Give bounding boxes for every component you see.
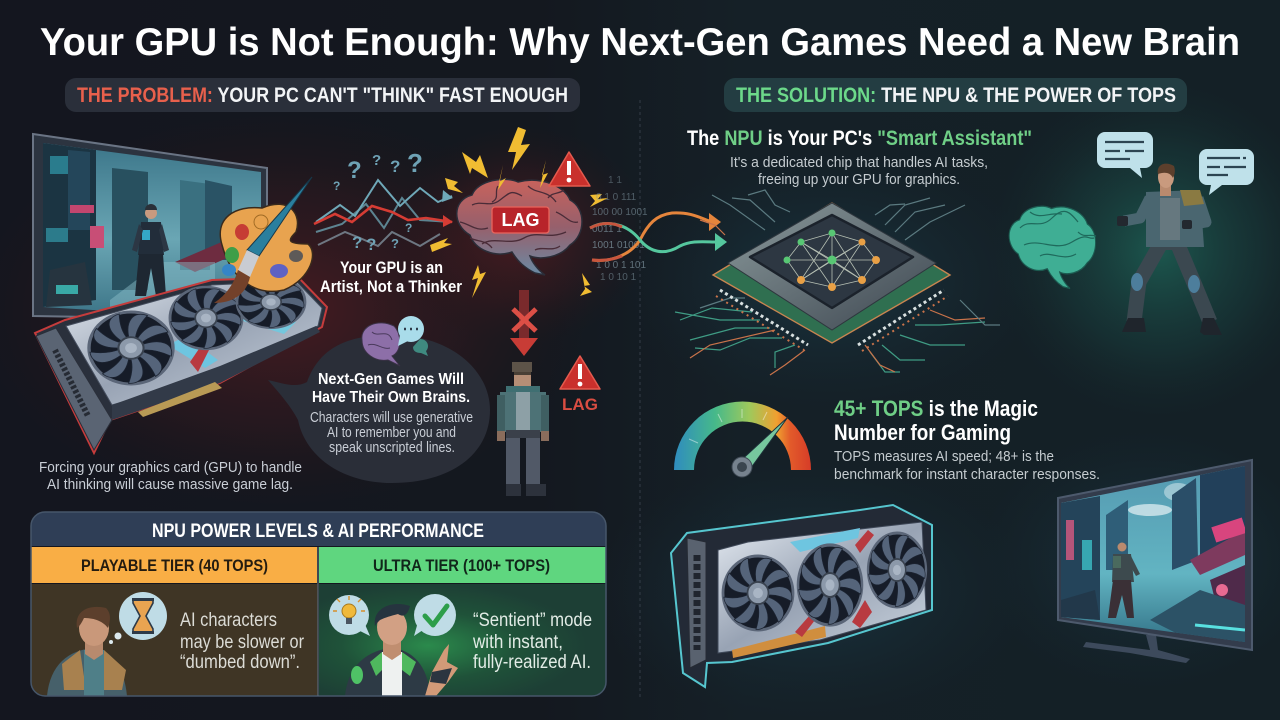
text: playable tier: “dumbed down”. <box>180 652 300 673</box>
icon: warning triangle <box>549 152 590 186</box>
text: ultra tier: fully-realized AI. <box>473 652 591 673</box>
callout: next-gen games bubble: AI to remember you and <box>327 425 456 441</box>
text: NPU smart assistant: freeing up your GPU for graphics. <box>758 171 960 188</box>
heading: the problem: THE PROBLEM: YOUR PC CAN'T "THINK" FAST ENOUGH <box>77 84 568 107</box>
icon: thought bubble with hourglass <box>109 592 167 644</box>
arrows: tangled thoughts with question marks: ? <box>372 152 381 169</box>
callout: next-gen games bubble: Have Their Own Brains. <box>312 389 470 406</box>
panel heading <box>31 512 606 546</box>
text: playable tier: AI characters <box>180 610 277 631</box>
icon: warning with lag label <box>560 356 600 414</box>
playable tier body <box>31 584 318 696</box>
callout: next-gen games bubble: Next-Gen Games Will <box>318 371 464 388</box>
decoration: binary data stream: 0 1 0 111 <box>596 192 637 203</box>
illustration: NPU chip <box>675 190 1000 375</box>
text: playable tier: may be slower or <box>180 632 305 653</box>
game character <box>132 204 169 296</box>
text: GPU is an artist: Artist, Not a Thinker <box>320 277 462 296</box>
text: 45+ TOPS: Number for Gaming <box>834 420 1011 445</box>
illustration: gpu with red outline <box>35 275 327 453</box>
decoration: binary data stream: 0011 1 <box>592 224 622 235</box>
illustration: AI character <box>1117 164 1222 335</box>
illustration: pixel character <box>497 362 549 496</box>
text: NPU smart assistant <box>687 127 1032 188</box>
text: ultra tier: “Sentient” mode <box>473 610 592 631</box>
text: GPU is an artist <box>320 258 462 296</box>
text: 45+ TOPS <box>834 396 1100 483</box>
ultra tier body <box>319 584 606 696</box>
text: GPU lag explanation: AI thinking will cause massive game lag. <box>47 476 293 493</box>
playable tier header: PLAYABLE TIER (40 TOPS) <box>81 556 268 575</box>
text: 45+ TOPS: benchmark for instant character responses. <box>834 466 1100 483</box>
text: NPU smart assistant: It's a dedicated chip that handles AI tasks, <box>730 154 988 171</box>
arrows: tangled thoughts with question marks: ? <box>391 236 399 251</box>
title: Your GPU is Not Enough: Why Next-Gen Games Need a New Brain <box>40 21 1240 64</box>
icon: check bubble <box>414 594 456 636</box>
icon: green brain <box>1009 206 1096 288</box>
icon: warning with lag label: LAG <box>562 395 598 414</box>
panel heading: NPU POWER LEVELS & AI PERFORMANCE <box>152 521 484 542</box>
text: GPU is an artist: Your GPU is an <box>340 258 443 277</box>
ultra tier header: ULTRA TIER (100+ TOPS) <box>373 556 550 575</box>
arrows: data flow to NPU <box>590 213 727 260</box>
arrows: tangled thoughts with question marks: ? <box>407 148 423 178</box>
arrows: tangled thoughts with question marks: ? <box>347 157 362 184</box>
character: unsure gamer <box>47 607 127 696</box>
text: GPU lag explanation <box>39 459 302 493</box>
heading: the solution <box>724 78 1187 112</box>
decoration: binary data stream: 1 0 0 1 101 <box>596 260 646 271</box>
heading: the problem <box>65 78 580 112</box>
decoration: binary data stream: 1 0 10 1 <box>600 272 637 283</box>
character: confident gamer <box>345 604 458 696</box>
callout: next-gen games bubble: Characters will use generative <box>310 410 473 426</box>
arrows: tangled thoughts with question marks: ? <box>405 221 412 235</box>
illustration: GPU with teal outline <box>671 505 932 687</box>
icon: idea bubble <box>329 595 370 636</box>
game character, right <box>1108 542 1140 618</box>
text: playable tier <box>180 612 304 668</box>
text: 45+ TOPS: TOPS measures AI speed; 48+ is the <box>834 448 1054 465</box>
chart: TOPS gauge <box>674 402 811 477</box>
text: NPU smart assistant: The NPU is Your PC's "Smart Assistant" <box>687 127 1032 150</box>
arrows: tangled thoughts with question marks: ? <box>333 179 340 193</box>
circuit traces <box>675 190 1000 375</box>
arrow: blocked lag arrow <box>510 290 538 356</box>
decoration: binary data stream: 100 00 1001 <box>592 207 648 218</box>
callout: next-gen games bubble: speak unscripted lines. <box>329 440 455 456</box>
illustration: monitor with game scene, right <box>1058 460 1253 663</box>
chip pins <box>720 290 944 345</box>
ultra tier header <box>319 547 606 583</box>
icon: speech bubble one <box>1097 132 1153 178</box>
lag tag: LAG <box>502 210 540 230</box>
icon: lightning bolts <box>430 127 608 298</box>
icon: paint palette and brush <box>214 177 313 303</box>
decoration: binary data stream: 1 1 <box>608 175 622 186</box>
text: 45+ TOPS: 45+ TOPS is the Magic <box>834 396 1038 421</box>
icon: overloaded brain with lag tag <box>457 179 582 275</box>
decoration: binary data stream: 1001 01001 <box>592 240 645 251</box>
panel: NPU power levels <box>31 512 606 696</box>
illustration: monitor with game scene <box>33 134 267 320</box>
arrows: tangled thoughts with question marks: ? <box>366 235 376 254</box>
arrows: tangled thoughts with question marks: ? <box>390 157 400 176</box>
heading: the solution: THE SOLUTION: THE NPU & THE POWER OF TOPS <box>736 84 1176 107</box>
text: GPU lag explanation: Forcing your graphics card (GPU) to handle <box>39 459 302 476</box>
playable tier header <box>31 547 317 583</box>
decoration: binary data stream <box>592 175 648 283</box>
arrows: tangled thoughts with question marks <box>314 148 453 254</box>
icon: speech bubble two <box>1199 149 1254 195</box>
text: ultra tier: with instant, <box>472 632 563 653</box>
text: ultra tier <box>472 610 592 673</box>
neural network icon <box>784 230 880 291</box>
icon: brain and chat bubble <box>362 316 428 366</box>
arrows: tangled thoughts with question marks: ? <box>352 233 362 252</box>
callout: next-gen games bubble <box>268 316 490 483</box>
